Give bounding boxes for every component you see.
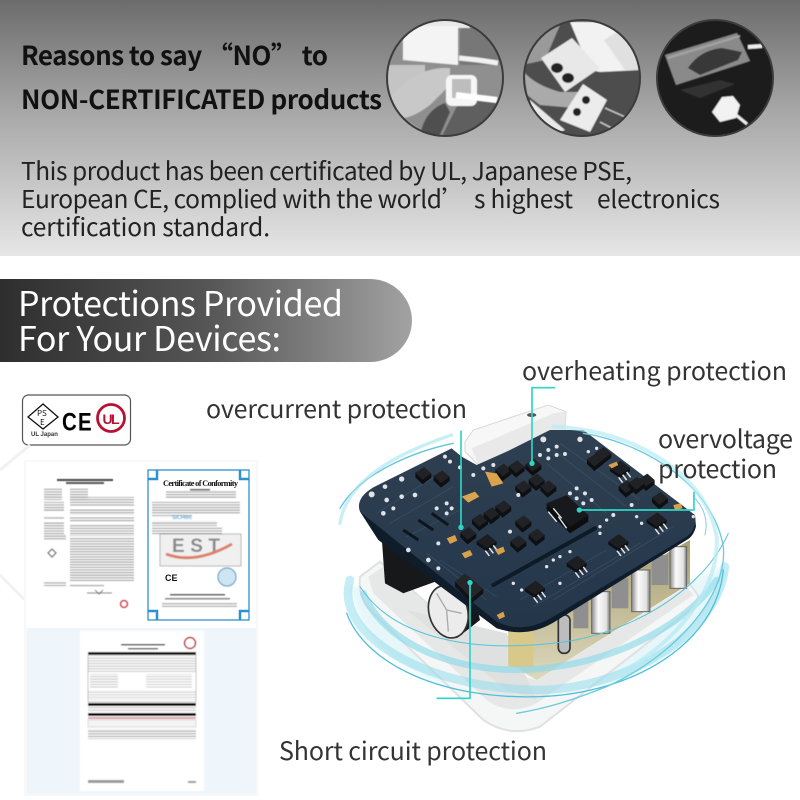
photo: opened plug	[522, 18, 642, 138]
photo: adapter plugged	[388, 21, 502, 135]
banner: protections heading: Protections Provided	[18, 277, 343, 326]
plug	[465, 405, 566, 465]
capacitors	[382, 537, 480, 642]
banner: protections heading	[0, 277, 412, 362]
text block: certification statement	[21, 153, 720, 244]
label: overvoltage protection	[658, 420, 793, 486]
label: overvoltage protection: overvoltage	[658, 420, 793, 456]
document: UL report	[80, 631, 204, 791]
document: certificate of conformity: CE	[165, 573, 178, 583]
USB ports	[558, 547, 687, 653]
photo: burnt device	[655, 18, 775, 138]
banner: protections heading: For Your Devices:	[18, 312, 281, 361]
certification logos	[22, 395, 130, 445]
product: charger circuit board	[340, 388, 728, 731]
leader lines	[437, 388, 694, 698]
certificate sheet	[24, 460, 258, 796]
icon: UL: UL	[102, 411, 120, 427]
label: overcurrent protection: overcurrent protection	[206, 390, 467, 426]
top panel: reasons	[0, 0, 800, 256]
protection rings	[340, 427, 728, 713]
label: short circuit protection: Short circuit protection	[279, 732, 547, 768]
icon: PSE	[28, 404, 58, 438]
icon: PSE: PS	[37, 408, 47, 419]
label: overvoltage protection: protection	[658, 450, 777, 486]
icon: CE: CE	[62, 408, 93, 436]
document: certificate of conformity: Certificate of Conformity	[163, 479, 239, 488]
text block: certification statement: s highest	[474, 181, 573, 216]
document: statement of conformity	[44, 479, 134, 608]
document: certificate of conformity: SiCHtec	[172, 515, 192, 521]
soft shadow glow	[350, 567, 725, 697]
PCB	[360, 512, 696, 632]
icon: PSE: E	[40, 417, 45, 428]
document: certificate of conformity	[148, 470, 249, 620]
text block: certification statement: electronics	[597, 181, 720, 216]
heading: reasons line 2: NON-CERTIFICATED products	[21, 80, 382, 117]
icon: PSE: UL Japan	[31, 432, 58, 438]
faint background sketch	[0, 445, 30, 600]
text block: certification statement: European CE, complied with the world’	[21, 181, 466, 216]
text block: certification statement: certification standard.	[21, 209, 270, 244]
label: overheating protection: overheating protection	[522, 352, 787, 388]
document: certificate of conformity: EST	[172, 536, 220, 557]
PCB traces	[377, 443, 673, 607]
text block: certification statement: This product has been certificated by UL, Japanese PSE,	[21, 153, 632, 188]
gold base	[508, 540, 690, 680]
heading: reasons line 1: Reasons to say “NO” to	[21, 36, 328, 73]
PCB components	[369, 436, 695, 619]
base tray	[360, 562, 698, 731]
